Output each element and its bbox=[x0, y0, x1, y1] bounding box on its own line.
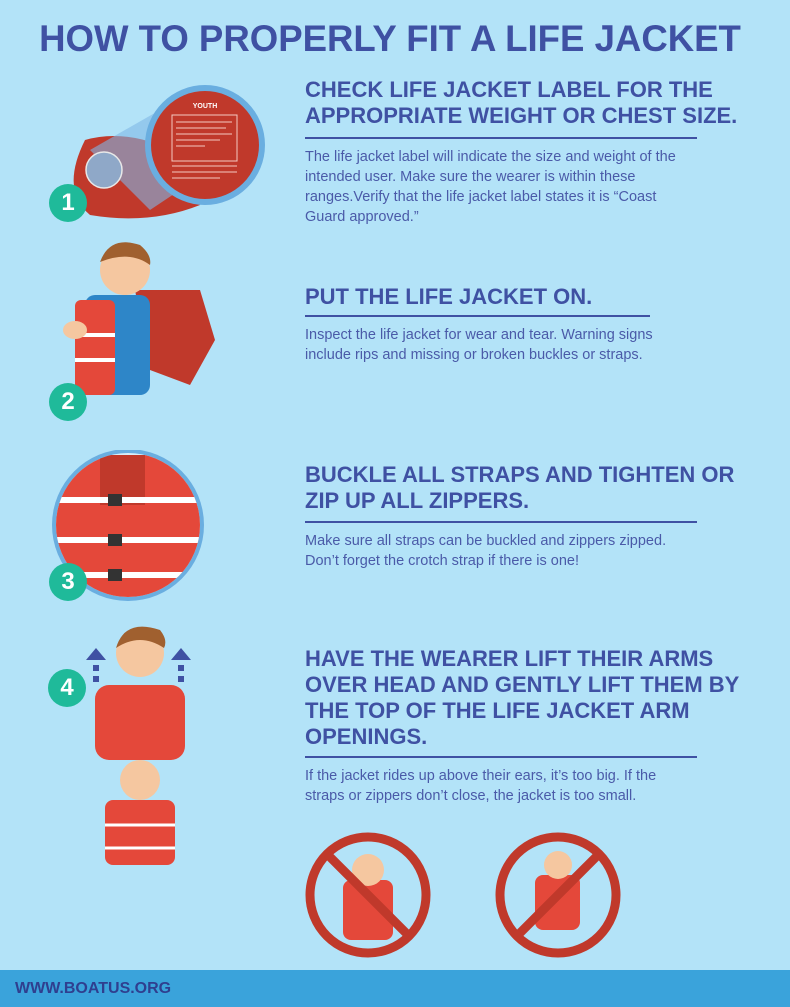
title: HOW TO PROPERLY FIT A LIFE JACKET bbox=[39, 18, 741, 59]
step 3 heading bbox=[305, 462, 734, 513]
step 4 heading: THE TOP OF THE LIFE JACKET ARM bbox=[305, 698, 690, 723]
illustration: step 4 adult lifting child bbox=[86, 626, 191, 865]
step 3 text: Make sure all straps can be buckled and zippers zipped. Don’t forget the crotch strap if there is one! bbox=[305, 533, 666, 569]
step 4 heading: OVER HEAD AND GENTLY LIFT THEM BY bbox=[305, 672, 739, 697]
step 3 heading: BUCKLE ALL STRAPS AND TIGHTEN OR bbox=[305, 462, 734, 487]
step 1 heading bbox=[305, 77, 737, 128]
badge 2 bbox=[49, 383, 87, 421]
badge 1 bbox=[49, 184, 87, 222]
footer bbox=[0, 970, 790, 1007]
step 4 heading bbox=[305, 646, 739, 749]
step 1 heading: APPROPRIATE WEIGHT OR CHEST SIZE. bbox=[305, 103, 737, 128]
badge 1: 1 bbox=[61, 189, 75, 216]
icon: prohibited too big bbox=[306, 832, 430, 958]
illustration: step 2 child putting jacket on bbox=[63, 242, 215, 395]
footer: WWW.BOATUS.ORG bbox=[15, 980, 171, 997]
step 2 heading: PUT THE LIFE JACKET ON. bbox=[305, 284, 592, 309]
step 1 text: The life jacket label will indicate the size and weight of the intended user. Make sure the wearer is within these ranges.Verify that the life jacket label states it is “Coast Guard approved.” bbox=[305, 149, 676, 225]
badge 2: 2 bbox=[61, 388, 75, 415]
badge 3: 3 bbox=[61, 568, 75, 595]
step 1 heading: CHECK LIFE JACKET LABEL FOR THE bbox=[305, 77, 713, 102]
illustration: step 1 label zoom bbox=[74, 85, 265, 218]
step 3 heading: ZIP UP ALL ZIPPERS. bbox=[305, 488, 529, 513]
step 4 heading: OPENINGS. bbox=[305, 724, 427, 749]
badge 4: 4 bbox=[60, 674, 74, 701]
icon: prohibited too small bbox=[496, 832, 620, 958]
illustration: step 1 label zoom: YOUTH bbox=[193, 103, 217, 110]
illustration: step 3 buckled jacket bbox=[52, 450, 204, 601]
badge 4 bbox=[48, 669, 86, 707]
badge 3 bbox=[49, 563, 87, 601]
step 4 heading: HAVE THE WEARER LIFT THEIR ARMS bbox=[305, 646, 713, 671]
step 2 text: Inspect the life jacket for wear and tear. Warning signs include rips and missing or broken buckles or straps. bbox=[305, 327, 653, 363]
step 4 text: If the jacket rides up above their ears, it’s too big. If the straps or zippers don’t close, the jacket is too small. bbox=[305, 768, 656, 804]
